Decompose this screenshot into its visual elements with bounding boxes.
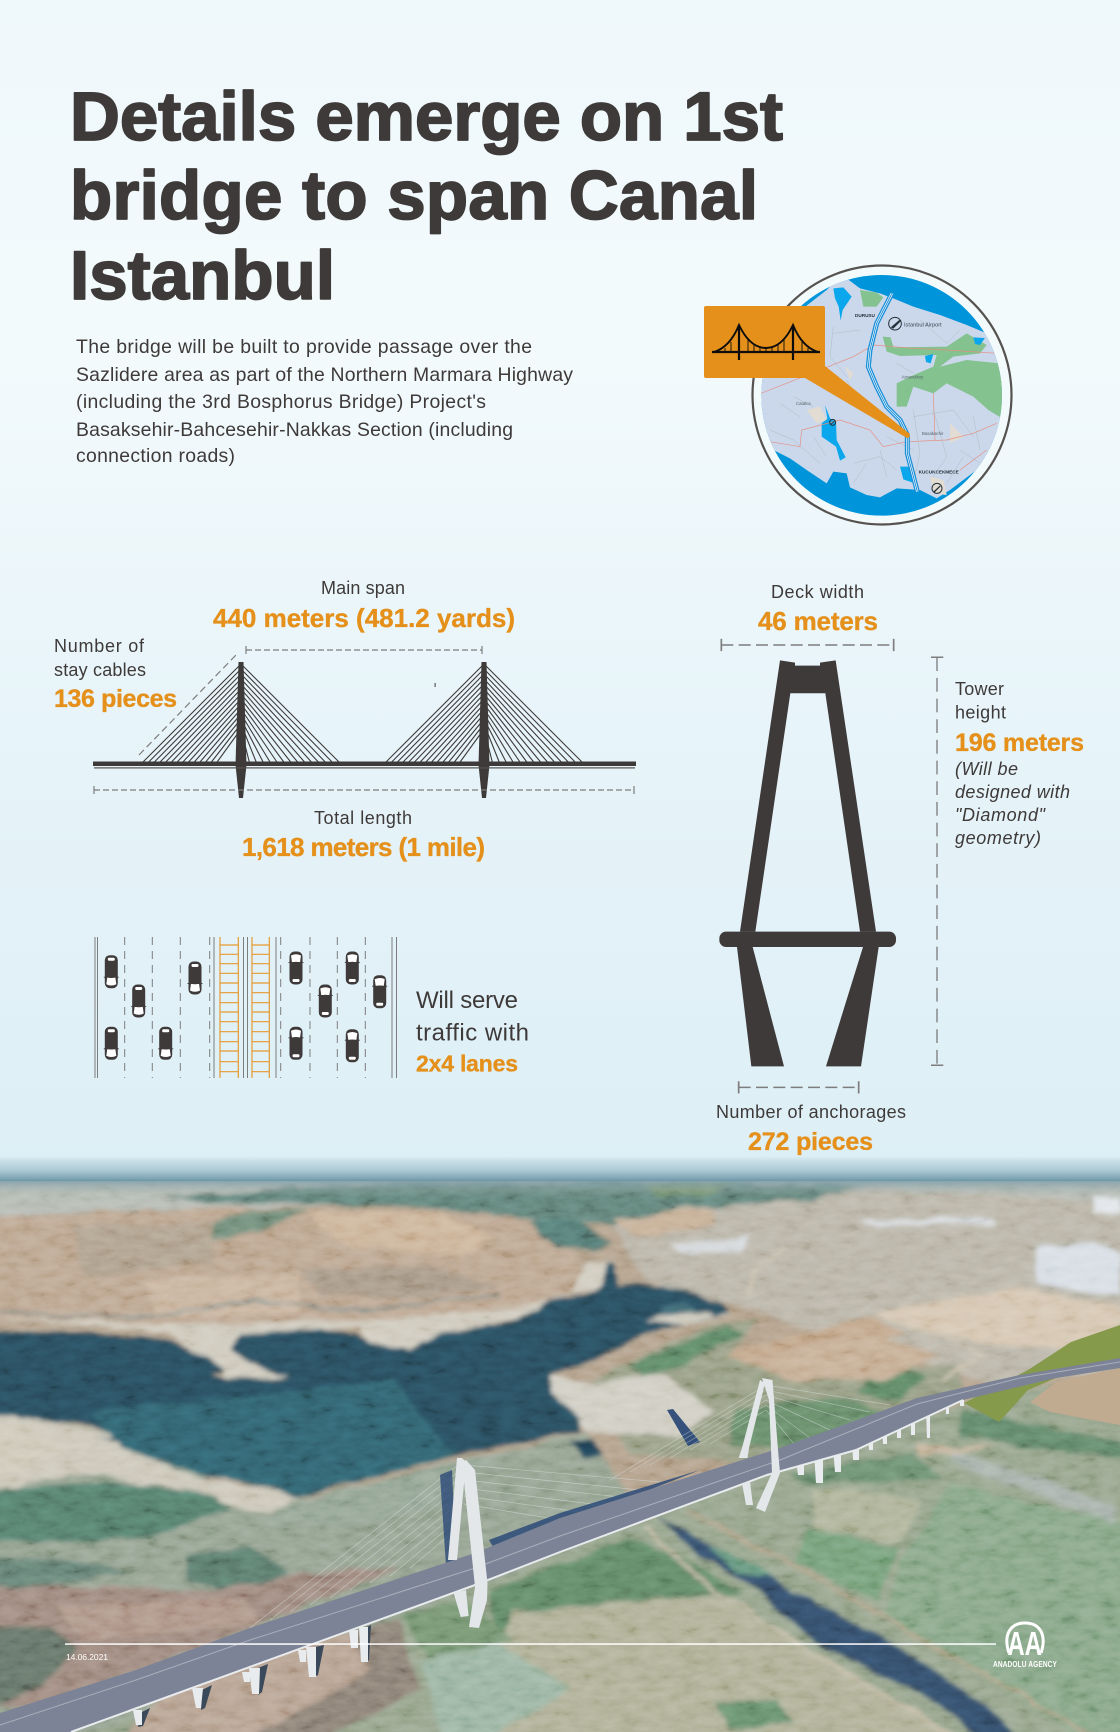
deck white edge <box>71 1400 963 1732</box>
deck <box>93 762 636 766</box>
locator map <box>704 266 1012 524</box>
tower height label: designed with <box>955 782 1070 802</box>
icon: suspension bridge <box>712 325 820 360</box>
lanes label: Will serve <box>416 987 518 1014</box>
tower shadow on lake side <box>667 1409 700 1446</box>
main span label <box>213 578 515 633</box>
title: Istanbul <box>70 237 335 314</box>
cable dashed guide <box>139 655 236 755</box>
deck width dimension <box>721 643 894 647</box>
total length label: 1,618 meters (1 mile) <box>242 832 485 862</box>
intro paragraph: (including the 3rd Bosphorus Bridge) Project's <box>76 391 486 413</box>
anchorage dimension <box>739 1085 859 1089</box>
map labels: Arnavutkoy <box>902 374 924 379</box>
map labels <box>796 313 959 475</box>
total length label: Total length <box>314 808 412 828</box>
map labels: Basaksehir <box>922 431 944 436</box>
tower lower legs <box>737 947 784 1066</box>
photo: aerial rendering of the bridge over the lake <box>0 1167 1120 1732</box>
title: Details emerge on 1st <box>70 78 783 155</box>
tan field beside embankment <box>1030 1368 1120 1425</box>
fans and towers <box>143 662 339 798</box>
total length label <box>242 808 485 862</box>
map labels: Catalca <box>796 401 811 406</box>
tower 1 <box>448 1458 488 1628</box>
title: bridge to span Canal <box>70 157 758 234</box>
lanes label <box>416 987 529 1077</box>
stay cables label <box>54 636 177 713</box>
deck width label <box>758 582 878 636</box>
sky fade above horizon <box>0 1156 1120 1181</box>
intro paragraph: Sazlidere area as part of the Northern Marmara Highway <box>76 364 573 386</box>
urban patches <box>807 367 963 495</box>
forests <box>860 290 1005 420</box>
cable stays, tower 1 <box>250 1465 660 1628</box>
texture grain <box>0 1180 1120 1732</box>
main span label: Main span <box>321 578 405 598</box>
landscape <box>0 1167 1120 1732</box>
anchorages label: 272 pieces <box>748 1128 873 1156</box>
tower height label: 196 meters <box>955 729 1084 757</box>
Anadolu Agency logo: AA <box>1008 1626 1042 1663</box>
callout with bridge icon <box>704 306 910 438</box>
tower height dimension <box>935 657 939 1065</box>
deck lane markings <box>0 1362 1120 1725</box>
footer rule <box>65 1643 996 1645</box>
piers <box>133 1396 964 1727</box>
cars, right carriageway <box>288 952 387 1062</box>
horizon haze <box>0 1181 1120 1194</box>
intro paragraph: connection roads) <box>76 445 235 467</box>
main span label: 440 meters (481.2 yards) <box>213 603 515 633</box>
tower 2 <box>739 1378 780 1512</box>
date: 14.06.2021 <box>66 1652 108 1662</box>
tower height label: "Diamond" <box>955 805 1047 825</box>
stay cables label: stay cables <box>54 660 146 680</box>
deck bar <box>719 932 896 947</box>
canal route <box>868 293 917 492</box>
tower height label: geometry) <box>955 828 1041 848</box>
Anadolu Agency logo: ANADOLU AGENCY <box>993 1659 1057 1669</box>
lakes <box>822 287 985 483</box>
main span dimension <box>246 649 482 651</box>
total length dimension <box>94 789 634 791</box>
anchorages label: Number of anchorages <box>716 1102 906 1122</box>
cars, left carriageway <box>104 955 202 1060</box>
deck shadows <box>268 1563 449 1627</box>
map body <box>758 273 1007 517</box>
title <box>70 78 783 314</box>
lanes label: traffic with <box>416 1020 529 1047</box>
deck <box>0 1358 1120 1732</box>
intro paragraph: The bridge will be built to provide passage over the <box>76 336 532 358</box>
lanes label: 2x4 lanes <box>416 1051 518 1077</box>
road markings <box>95 937 396 1078</box>
tower height label: (Will be <box>955 759 1018 779</box>
bridge elevation diagram <box>93 646 636 798</box>
3D bridge rendering <box>0 1358 1120 1732</box>
intro paragraph <box>76 336 573 467</box>
roads <box>761 345 997 470</box>
Anadolu Agency logo <box>993 1623 1057 1669</box>
airport icons <box>830 317 942 493</box>
intro paragraph: Basaksehir-Bahcesehir-Nakkas Section (including <box>76 419 513 441</box>
cable stays, tower 2 <box>610 1385 890 1480</box>
map labels: DURUSU <box>855 313 876 318</box>
callout box <box>704 306 825 378</box>
map labels: Istanbul Airport <box>904 323 942 329</box>
stay cables label: 136 pieces <box>54 685 177 713</box>
land <box>758 278 1007 498</box>
tower height label: Tower <box>955 679 1004 699</box>
median ladders <box>220 937 269 1078</box>
tower height label: height <box>955 702 1006 722</box>
tower height label <box>955 679 1084 848</box>
tower elevation diagram <box>719 639 943 1094</box>
deck width label: 46 meters <box>758 606 878 636</box>
green embankment patch <box>964 1325 1120 1422</box>
deck width label: Deck width <box>771 582 864 602</box>
anchorages label <box>716 1102 906 1156</box>
road cross-section diagram <box>95 937 396 1078</box>
stay cables label: Number of <box>54 636 145 656</box>
callout pointer <box>805 366 910 438</box>
map labels: KUCUKCEKMECE <box>919 470 959 475</box>
map ring <box>752 266 1012 524</box>
tower upper legs <box>740 660 876 932</box>
